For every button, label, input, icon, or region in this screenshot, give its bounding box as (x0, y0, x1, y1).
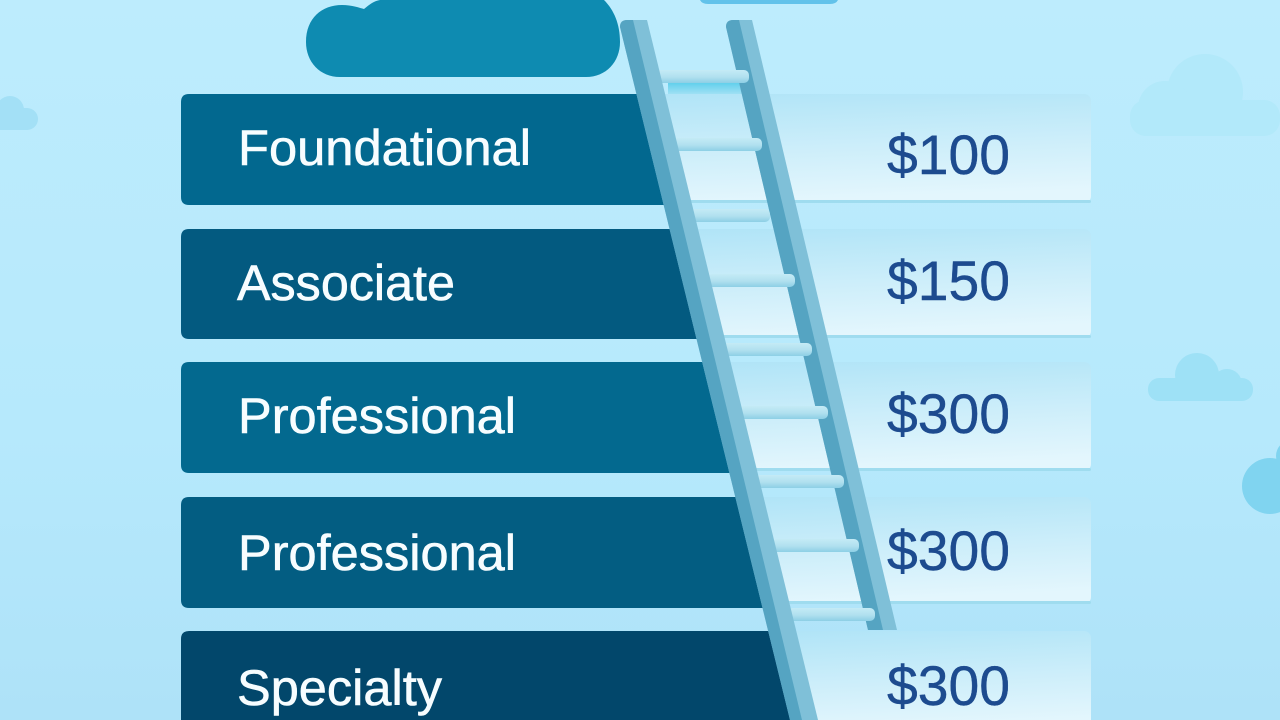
ladder rungs (655, 70, 875, 621)
rung shadow glow (668, 83, 746, 94)
background cloud: left edge (0, 96, 38, 130)
label: Professional first: Professional (238, 388, 516, 444)
price: $300 second: $300 (887, 519, 1010, 582)
label: Foundational: Foundational (238, 120, 531, 176)
price card: $300 third (780, 631, 1091, 720)
label: Professional second: Professional (238, 525, 516, 581)
background cloud: right small (1148, 353, 1253, 401)
price: $100: $100 (887, 123, 1010, 186)
background cloud: faint large right (1130, 54, 1280, 136)
cloud: top dark (306, 0, 620, 77)
tier bar: Professional first (181, 362, 745, 473)
label: Associate: Associate (237, 255, 455, 311)
tier bar: Foundational (181, 94, 680, 205)
ladder right rail (726, 20, 897, 630)
price: $300 third: $300 (887, 654, 1010, 717)
tier bar: Specialty (181, 631, 810, 720)
price card: $150 (680, 229, 1091, 338)
price card: $100 (640, 94, 1091, 203)
ladder (620, 20, 897, 720)
price card: $300 first (710, 362, 1091, 471)
background cloud: right edge (1242, 440, 1280, 514)
cloud: top right sliver (700, 0, 838, 4)
label: Specialty: Specialty (237, 660, 442, 716)
ladder left rail (620, 20, 818, 720)
tier bar: Associate (181, 229, 710, 339)
price: $300 first: $300 (887, 382, 1010, 445)
tier bar: Professional second (181, 497, 775, 608)
price card: $300 second (745, 497, 1091, 604)
price: $150: $150 (887, 249, 1010, 312)
